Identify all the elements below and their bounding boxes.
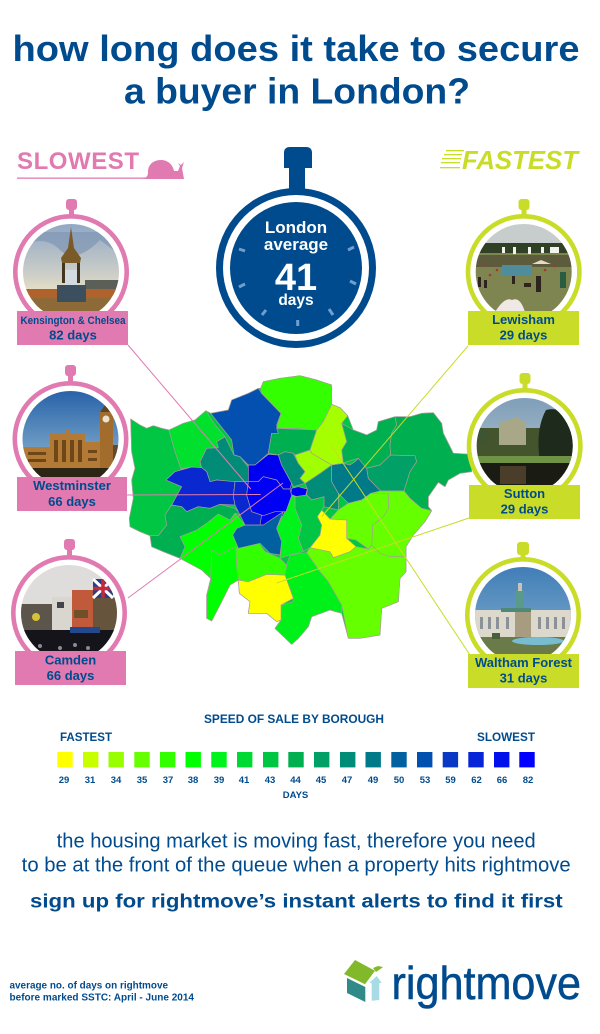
- photo: town hall: [475, 567, 571, 654]
- panel: Kensington & Chelsea: Kensington & Chelsea: [20, 315, 126, 327]
- title: a buyer in London?: [124, 70, 470, 112]
- label: [17, 477, 127, 511]
- photo: Camden Town: [21, 565, 117, 651]
- legend values: [59, 775, 533, 786]
- legend values: 66: [497, 775, 507, 786]
- clock ticks: [239, 247, 356, 326]
- panel: Kensington & Chelsea: 82 days: [49, 328, 97, 342]
- legend swatches: [57, 752, 535, 767]
- legend: speed of sale by borough: SLOWEST: [477, 730, 536, 744]
- average text: [264, 218, 328, 309]
- body text: [22, 830, 571, 877]
- panel: Sutton: Sutton: [504, 486, 545, 501]
- panel: Lewisham: Lewisham: [492, 312, 555, 327]
- photo: country house: [476, 398, 573, 485]
- legend values: 35: [137, 775, 148, 786]
- legend values: 29: [59, 775, 69, 786]
- legend values: 50: [394, 775, 404, 786]
- icon: speed lines: [440, 150, 464, 168]
- panel: Waltham Forest: [467, 542, 579, 688]
- central stopwatch: London average: [216, 147, 376, 348]
- label: [468, 654, 579, 688]
- legend values: 38: [188, 775, 198, 786]
- panel: Waltham Forest: Waltham Forest: [475, 655, 573, 670]
- connector lines: [127, 345, 470, 655]
- panel: Lewisham: 29 days: [500, 328, 547, 342]
- average text: London: [265, 218, 327, 237]
- panel: Westminster: [15, 365, 127, 511]
- panel: Camden: [13, 539, 126, 685]
- label: [15, 651, 126, 685]
- title: [12, 28, 580, 112]
- fastest heading: FASTEST: [462, 145, 580, 175]
- label: [17, 311, 128, 345]
- panel: Westminster: Westminster: [33, 478, 111, 493]
- average text: days: [278, 292, 314, 309]
- legend values: 37: [163, 775, 173, 786]
- slowest heading: SLOWEST: [17, 148, 139, 175]
- label: [468, 311, 579, 345]
- legend: speed of sale by borough: SPEED OF SALE BY BOROUGH: [204, 712, 384, 726]
- icon: house: [344, 960, 383, 1002]
- legend values: 43: [265, 775, 275, 786]
- panel: Camden: 66 days: [47, 668, 94, 683]
- legend values: 62: [471, 775, 482, 786]
- label: [469, 485, 580, 519]
- legend: speed of sale by borough: FASTEST: [60, 730, 113, 744]
- body text: to be at the front of the queue when a property hits rightmove: [22, 855, 571, 877]
- legend values: 53: [420, 775, 430, 786]
- legend values: 82: [523, 775, 533, 786]
- photo: park festival: [476, 224, 572, 311]
- photo: Houses of Parliament: [22, 391, 118, 477]
- footnote: average no. of days on rightmove: [10, 981, 169, 992]
- photo: Albert Memorial: [23, 224, 119, 311]
- London borough map: [129, 376, 472, 644]
- panel: Lewisham: [468, 199, 579, 345]
- average text: average: [264, 235, 328, 254]
- legend values: 31: [85, 775, 96, 786]
- panel: Camden: Camden: [45, 652, 96, 668]
- legend: speed of sale by borough: DAYS: [283, 790, 308, 801]
- legend values: 41: [239, 775, 250, 786]
- legend values: 49: [368, 775, 378, 786]
- call to action: sign up for rightmove’s instant alerts to find it first: [30, 890, 563, 912]
- panel: Westminster: 66 days: [48, 494, 96, 509]
- legend values: 59: [445, 775, 456, 786]
- legend values: 34: [111, 775, 122, 786]
- panel: Sutton: 29 days: [501, 502, 548, 516]
- legend: speed of sale by borough: [57, 712, 536, 801]
- panel: Waltham Forest: 31 days: [500, 670, 547, 686]
- icon: snail: [143, 160, 184, 179]
- legend values: 45: [316, 775, 327, 786]
- union flag: [93, 579, 113, 598]
- rightmove logo: rightmove: [392, 957, 581, 1009]
- legend values: 44: [290, 775, 301, 786]
- panel: Sutton: [469, 373, 580, 519]
- panel: Kensington & Chelsea: [15, 199, 128, 345]
- legend values: 39: [214, 775, 224, 786]
- footnote: before marked SSTC: April - June 2014: [10, 993, 195, 1004]
- slowest heading: [17, 148, 184, 179]
- footnote: [10, 981, 195, 1004]
- average text: 41: [275, 257, 317, 299]
- body text: the housing market is moving fast, therefore you need: [57, 830, 536, 852]
- title: how long does it take to secure: [12, 28, 580, 69]
- legend values: 47: [342, 775, 352, 786]
